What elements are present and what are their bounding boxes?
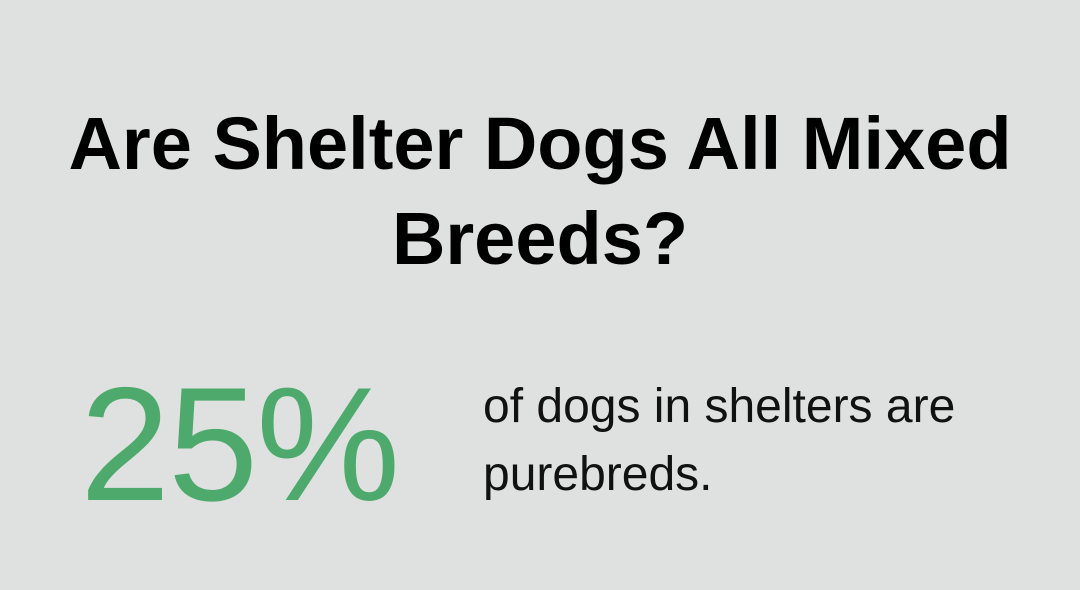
- description text: [483, 380, 955, 501]
- title: Are Shelter Dogs All Mixed: [68, 102, 1012, 185]
- title: [68, 102, 1012, 280]
- description text: of dogs in shelters are: [483, 380, 955, 433]
- description text: purebreds.: [483, 448, 712, 501]
- statistic: 25%: 25%: [80, 354, 398, 535]
- title: Breeds?: [392, 197, 688, 280]
